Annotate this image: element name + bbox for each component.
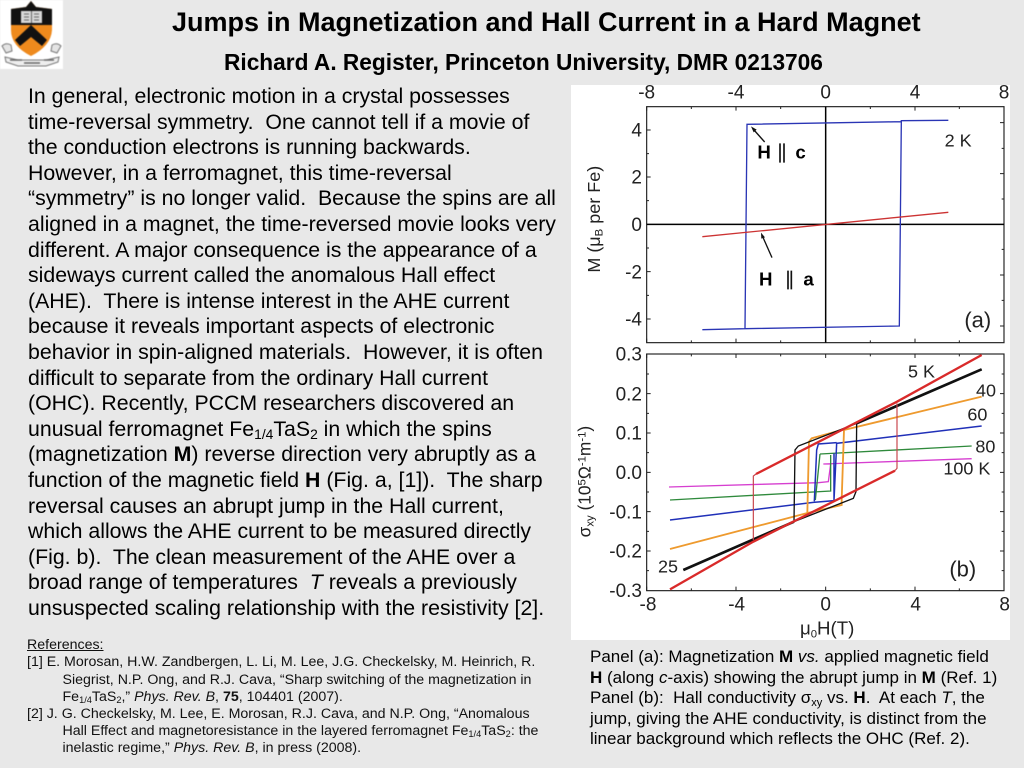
title: Jumps in Magnetization and Hall Current in a Hard Magnet xyxy=(172,7,921,37)
caption: panel descriptions: Panel (b): Hall conductivity σxy vs. H. At each T, the xyxy=(590,688,985,709)
axis tick labels: -8 xyxy=(640,595,656,616)
caption: panel descriptions: linear background which reflects the OHC (Ref. 2). xyxy=(590,729,970,748)
arrows and curve labels: 2 K xyxy=(945,130,972,150)
text block: main explanation: unsuspected scaling relationship with the resistivity [2]. xyxy=(28,596,544,620)
curve: 100 K xyxy=(669,459,972,487)
arrows and curve labels: H xyxy=(759,268,772,289)
text block: main explanation: because it reveals important aspects of electronic xyxy=(28,314,494,338)
arrows and curve labels xyxy=(751,126,991,332)
references: Fe1/4TaS2,” Phys. Rev. B, 75, 104401 (2007). xyxy=(62,688,343,705)
curve labels: 40 xyxy=(976,381,996,401)
caption: panel descriptions: jump, giving the AHE conductivity, is distinct from the xyxy=(590,708,987,728)
curve labels: 25 xyxy=(658,557,678,577)
references: References: xyxy=(27,637,104,653)
axis tick labels: -4 xyxy=(728,595,745,616)
axis tick labels: -0.3 xyxy=(609,581,642,602)
y axis label: M (μ xyxy=(584,236,604,273)
y axis label: xy xyxy=(584,515,596,527)
y axis label: Ω xyxy=(575,466,595,479)
axis tick labels: 8 xyxy=(999,82,1009,103)
text block: main explanation xyxy=(28,84,556,620)
arrows and curve labels: H xyxy=(757,141,771,162)
text block: main explanation: which allows the AHE current to be measured directly xyxy=(28,519,531,543)
axis tick labels xyxy=(609,345,1010,616)
curve: 25 K xyxy=(683,369,982,570)
references xyxy=(27,637,538,756)
y axis label: per Fe) xyxy=(584,166,604,229)
arrows and curve labels: c xyxy=(795,141,806,162)
text block: main explanation: unusual ferromagnet Fe1/4TaS2 in which the spins xyxy=(28,417,492,442)
text block: main explanation: (AHE). There is intense interest in the AHE current xyxy=(28,289,509,313)
x axis label: μ xyxy=(800,618,811,639)
axis tick labels: 0.3 xyxy=(616,345,642,366)
red line, H parallel a xyxy=(702,212,948,237)
axis tick labels: 2 xyxy=(631,168,642,189)
axis tick labels: 4 xyxy=(631,121,642,142)
references: inelastic regime,” Phys. Rev. B, in press (2008). xyxy=(62,740,361,756)
text block: main explanation: “symmetry” is no longer valid. Because the spins are all xyxy=(28,186,556,210)
chart a: magnetization vs field xyxy=(584,82,1009,343)
text block: main explanation: (magnetization M) reverse direction very abruptly as a xyxy=(28,442,536,466)
text block: main explanation: sideways current called the anomalous Hall effect xyxy=(28,263,495,287)
axis tick labels: -0.2 xyxy=(609,542,642,563)
axis tick labels: -2 xyxy=(625,262,642,283)
references: Siegrist, N.P. Ong, and R.J. Cava, “Sharp switching of the magnetization in xyxy=(62,672,531,688)
logo: Princeton shield xyxy=(0,0,63,69)
curve labels: 5 K xyxy=(908,362,935,382)
arrows and curve labels: (a) xyxy=(964,307,991,332)
x axis label: H(T) xyxy=(817,618,854,639)
axis tick labels: 4 xyxy=(910,82,920,103)
axis tick labels: -0.1 xyxy=(609,502,642,523)
axis tick labels: 0 xyxy=(631,215,642,236)
curve: 80 K xyxy=(670,446,972,500)
curve: 5 K xyxy=(670,355,982,589)
text block: main explanation: (Fig. b). The clean measurement of the AHE over a xyxy=(28,545,515,569)
curve labels xyxy=(658,362,996,581)
curve labels: (b) xyxy=(949,556,976,581)
curve labels: 100 K xyxy=(943,459,990,479)
y axis label: -1 xyxy=(576,456,588,466)
axis tick labels: -8 xyxy=(638,82,655,103)
curve labels: 60 xyxy=(967,405,987,425)
axis tick labels: -4 xyxy=(625,310,642,331)
text block: main explanation: function of the magnetic field H (Fig. a, [1]). The sharp xyxy=(28,468,543,492)
curve: 40 K xyxy=(670,397,982,549)
y axis label: 5 xyxy=(576,479,588,485)
text block: main explanation: difficult to separate from the ordinary Hall current xyxy=(28,366,488,390)
axis tick labels: 4 xyxy=(910,595,921,616)
text block: main explanation: (OHC). Recently, PCCM researchers discovered an xyxy=(28,391,514,415)
chart b: Hall conductivity vs field xyxy=(575,345,1010,640)
curve labels: 80 xyxy=(975,436,995,456)
text block: main explanation: time-reversal symmetry. One cannot tell if a movie of xyxy=(28,110,529,134)
text block: main explanation: behavior in spin-aligned materials. However, it is often xyxy=(28,340,543,364)
text block: main explanation: the conduction electrons is running backwards. xyxy=(28,135,471,159)
caption: panel descriptions: Panel (a): Magnetization M vs. applied magnetic field xyxy=(590,647,989,666)
axis tick labels xyxy=(625,82,1009,331)
arrows and curve labels: a xyxy=(803,268,814,289)
axis tick labels: -4 xyxy=(728,82,744,103)
references: Hall Effect and magnetoresistance in the layered ferromagnet Fe1/4TaS2: the xyxy=(62,723,538,739)
x axis label: 0 xyxy=(811,628,817,640)
axis tick labels: 0.0 xyxy=(616,463,642,484)
axis tick labels: 0 xyxy=(820,595,831,616)
axis tick labels: 0.1 xyxy=(616,424,642,445)
text block: main explanation: different. A major consequence is the appearance of a xyxy=(28,238,537,262)
y axis label: (10 xyxy=(575,485,595,515)
y axis label: B xyxy=(594,229,606,236)
y axis label: ) xyxy=(575,426,595,432)
caption: panel descriptions: H (along c-axis) showing the abrupt jump in M (Ref. 1) xyxy=(590,668,997,686)
text block: main explanation: In general, electronic motion in a crystal possesses xyxy=(28,84,510,108)
axis tick labels: 8 xyxy=(999,595,1010,616)
y axis label: -1 xyxy=(576,432,588,442)
blue hysteresis loop, H parallel c xyxy=(702,120,948,330)
references: [1] E. Morosan, H.W. Zandbergen, L. Li, M. Lee, J.G. Checkelsky, M. Heinrich, R. xyxy=(27,654,535,670)
subtitle: author line: Richard A. Register, Princeton University, DMR 0213706 xyxy=(224,49,823,75)
curve: 60 K xyxy=(670,426,982,520)
text block: main explanation: reversal causes an abrupt jump in the Hall current, xyxy=(28,494,504,518)
y axis label: m xyxy=(575,442,595,456)
references: [2] J. G. Checkelsky, M. Lee, E. Morosan, R.J. Cava, and N.P. Ong, “Anomalous xyxy=(27,706,530,722)
text block: main explanation: broad range of temperatures T reveals a previously xyxy=(28,570,517,594)
axis tick labels: 0.2 xyxy=(616,384,642,405)
text block: main explanation: aligned in a magnet, the time-reversed movie looks very xyxy=(28,212,556,236)
y axis label: σ xyxy=(575,527,595,537)
axis tick labels: 0 xyxy=(820,82,831,103)
caption: panel descriptions xyxy=(590,647,997,748)
text block: main explanation: However, in a ferromagnet, this time-reversal xyxy=(28,161,452,185)
